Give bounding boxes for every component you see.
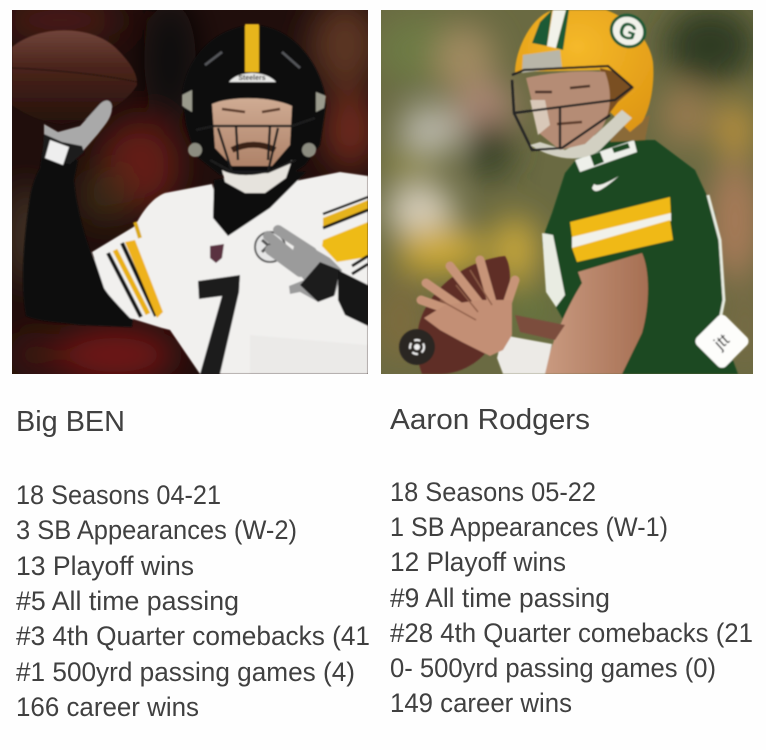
photo background crowd bbox=[12, 10, 368, 374]
Steelers logo patch bbox=[255, 232, 285, 262]
jersey side seam bbox=[708, 195, 724, 320]
wrist tape bbox=[45, 140, 69, 165]
G logo: G bbox=[615, 16, 641, 46]
jtt badge bbox=[693, 312, 751, 370]
jersey side white number bbox=[542, 233, 565, 307]
stat list: Big BEN: 3 SB Appearances (W-2) bbox=[16, 515, 297, 545]
stat list: Aaron Rodgers: #9 All time passing bbox=[390, 583, 610, 613]
photo: Aaron Rodgers bbox=[375, 7, 761, 374]
mouth bbox=[557, 122, 582, 124]
stat list: Aaron Rodgers: 18 Seasons 05-22 bbox=[390, 477, 596, 507]
stat list: Big BEN bbox=[16, 480, 370, 722]
white jersey bbox=[92, 172, 368, 374]
heading: Aaron Rodgers: Aaron Rodgers bbox=[390, 404, 590, 436]
heading: Big BEN: Big BEN bbox=[16, 406, 125, 438]
throwing glove bbox=[44, 101, 112, 160]
jtt badge: jtt bbox=[710, 330, 733, 354]
football bbox=[12, 30, 137, 124]
stat list: Aaron Rodgers: 0- 500yrd passing games (0) bbox=[390, 653, 716, 683]
helmet inner bbox=[600, 68, 634, 118]
stat list: Aaron Rodgers: 12 Playoff wins bbox=[390, 547, 566, 577]
hands bbox=[421, 260, 515, 356]
NFL shield bbox=[210, 244, 224, 263]
green jersey bbox=[542, 140, 738, 374]
face bbox=[212, 98, 292, 166]
back hand on ball bbox=[515, 315, 565, 340]
Nike swoosh bbox=[592, 176, 619, 191]
photo: Ben Roethlisberger bbox=[12, 10, 368, 374]
G logo bbox=[608, 12, 647, 50]
forearm bbox=[545, 253, 648, 374]
chin strap bbox=[530, 110, 632, 158]
stat list: Big BEN: 166 career wins bbox=[16, 692, 199, 722]
white wristband bbox=[497, 335, 552, 374]
face mask bbox=[512, 66, 632, 150]
black arm sleeve bbox=[23, 152, 135, 327]
shoulder number bbox=[575, 140, 637, 172]
football bbox=[417, 256, 510, 374]
jersey number 7 bbox=[198, 275, 240, 374]
helmet: Steelers bbox=[238, 75, 266, 82]
chin guard bbox=[222, 160, 292, 193]
stat list: Aaron Rodgers: 1 SB Appearances (W-1) bbox=[390, 512, 668, 542]
helmet bumper bbox=[522, 50, 562, 73]
helmet bbox=[515, 10, 653, 132]
face mask bbox=[196, 118, 315, 172]
sleeve stripes bbox=[570, 197, 673, 262]
stat list: Aaron Rodgers: #28 4th Quarter comebacks (21 bbox=[390, 618, 753, 648]
stat list: Big BEN: 13 Playoff wins bbox=[16, 551, 194, 581]
helmet bbox=[182, 24, 326, 193]
helmet yellow stripe bbox=[245, 24, 259, 72]
Steelers bumper bbox=[229, 73, 276, 82]
camera lens badge bbox=[399, 329, 435, 365]
face bbox=[526, 71, 610, 150]
stat list: Big BEN: #1 500yrd passing games (4) bbox=[16, 657, 355, 687]
helmet side clips bbox=[182, 90, 326, 112]
left sleeve stripes bbox=[108, 222, 163, 318]
stat list: Aaron Rodgers: 149 career wins bbox=[390, 688, 572, 718]
black neck gaiter bbox=[213, 170, 306, 236]
photo background crowd bbox=[375, 7, 761, 374]
stat list: Big BEN: #5 All time passing bbox=[16, 586, 239, 616]
stat list: Big BEN: #3 4th Quarter comebacks (41 bbox=[16, 621, 370, 651]
stat list: Aaron Rodgers bbox=[390, 477, 753, 718]
right sleeve stripes bbox=[322, 197, 368, 274]
hair bbox=[610, 115, 650, 142]
left hand glove bbox=[268, 230, 368, 326]
helmet stripes bbox=[532, 10, 569, 50]
stat list: Big BEN: 18 Seasons 04-21 bbox=[16, 480, 221, 510]
